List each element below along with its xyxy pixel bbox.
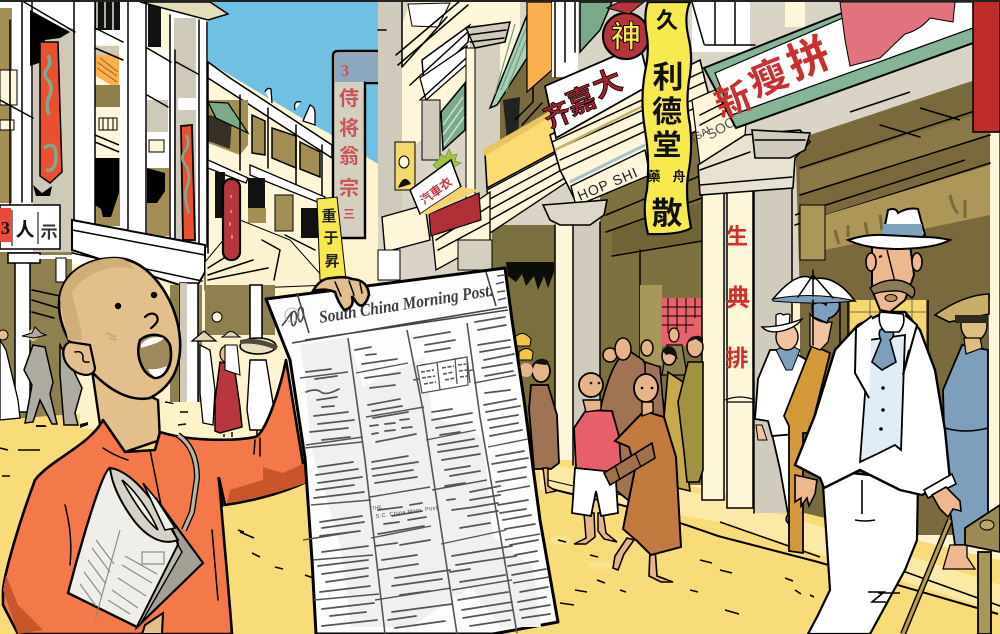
- umbrella: [773, 270, 855, 345]
- hanging yellow sign: 昇: [324, 253, 340, 270]
- lapels: [855, 315, 917, 398]
- tunic folds: [65, 438, 260, 600]
- collar: [879, 312, 904, 332]
- hanging grey sign: 宗: [339, 176, 359, 200]
- sidewalk and street: [0, 402, 1000, 634]
- hand under bundle: [142, 613, 163, 634]
- sign: small vendor sign: 汽車衣: [417, 174, 455, 207]
- waistcoat: [860, 335, 905, 462]
- awning: green striped: [490, 15, 527, 108]
- figure: boy in brown robe carrying parcel: [604, 374, 681, 582]
- masthead logo: [282, 307, 303, 326]
- body copy strokes: [306, 369, 377, 626]
- shop band: cream left: [382, 205, 430, 252]
- left shop sign: [0, 205, 60, 249]
- banner: narrow red banner: [181, 125, 195, 240]
- hanging yellow sign: 于: [323, 231, 339, 247]
- left hand: [795, 475, 817, 506]
- white hat: [848, 208, 950, 249]
- sign: large green framed sign: 拼: [781, 30, 837, 89]
- column: middle pillar: [543, 200, 607, 467]
- figure: gentleman in white suit with cane: [795, 208, 961, 634]
- columns of right building: [543, 130, 810, 513]
- sign: tall yellow vertical: 利: [652, 60, 684, 95]
- sign: TSAI lettering: TSAI: [688, 125, 713, 146]
- newsboy: [3, 258, 306, 634]
- open mouth: [138, 335, 171, 378]
- awning: orange: [527, 2, 552, 92]
- column: main front pillar: 排: [726, 346, 748, 371]
- background pedestrians left: [0, 327, 278, 442]
- hanging grey sign: [333, 51, 380, 238]
- head shading: [60, 258, 135, 340]
- hanging yellow sign: 重: [321, 207, 337, 225]
- ear: [63, 342, 95, 375]
- small masthead caption in paper: THE: [371, 505, 383, 512]
- column rules: [348, 323, 517, 634]
- left shop sign: 3: [1, 218, 10, 238]
- sign: large white sign with dark red characters: 嘉: [562, 80, 601, 122]
- figure: man behind with hat: [222, 332, 240, 375]
- sign: TSAI lettering: SOC: [704, 114, 738, 143]
- figure: figure with conical hat in white: [192, 331, 216, 425]
- first-floor cornice: [72, 220, 205, 290]
- figure: olive man at column: [678, 336, 703, 482]
- cane: [903, 520, 950, 634]
- sign: tall yellow vertical: 散: [652, 196, 682, 231]
- sky: [205, 2, 380, 165]
- sign: large white sign with dark red characters: [539, 45, 650, 138]
- right hand on cane: [932, 487, 961, 517]
- background crowd near pink window: [598, 328, 703, 520]
- tunic shading: [227, 463, 306, 503]
- sign: tall yellow vertical: 堂: [652, 129, 682, 162]
- sheet: [266, 268, 558, 634]
- sleeve cuff right: [924, 474, 956, 498]
- paper caption: S.C. China Morn. Post: [375, 505, 438, 520]
- figure: woman in red coat: [215, 346, 242, 437]
- figure: boy in red shirt: [572, 373, 621, 544]
- lantern stand: [965, 505, 1000, 634]
- figure: man in blue with conical hat: [935, 294, 989, 569]
- sign: tall yellow vertical: 藥: [647, 169, 661, 184]
- sign: tall yellow vertical: [642, 2, 691, 234]
- hand gripping newspaper: [313, 277, 369, 310]
- hanging grey sign: 三: [343, 207, 355, 221]
- ground floor arcade left: [0, 252, 75, 422]
- ceiling of veranda: [795, 55, 990, 300]
- sign: large white sign with dark red characters: 齐: [539, 97, 576, 135]
- figure: man in grey suit: [22, 327, 57, 427]
- figure: white-robed person with wide hat: [240, 338, 278, 442]
- rolled newspapers: [68, 468, 203, 627]
- sign: large green framed sign: 瘦: [743, 52, 794, 105]
- masthead divider: [292, 272, 508, 343]
- sign: TSAI lettering: [688, 90, 750, 146]
- shop beams: [550, 60, 715, 200]
- shop window: yellow panes: [848, 245, 928, 365]
- sign: tall yellow vertical: 久: [656, 8, 678, 33]
- figure: second man in grey: [60, 345, 88, 428]
- recess shadow behind newspaper: [506, 262, 554, 290]
- sign: small vendor sign: [410, 160, 461, 214]
- cheek marks: [106, 333, 117, 340]
- banner: red left banner: [40, 42, 62, 183]
- face: [872, 245, 914, 312]
- nose: [145, 314, 158, 328]
- shop band: yellow: [485, 112, 558, 188]
- moustache: [870, 280, 915, 298]
- sign: round red medallion: [603, 2, 649, 59]
- left shop sign: 人: [15, 219, 35, 241]
- suit jacket: [795, 312, 950, 495]
- hanging grey sign: 将: [339, 117, 359, 140]
- lower column and arcade: [56, 258, 202, 405]
- figure: lady with umbrella in ochre coat: [773, 270, 855, 553]
- shop band: red: [429, 193, 481, 236]
- neck: [92, 370, 160, 452]
- cravat: [872, 328, 896, 370]
- sign: large white sign with dark red characters: 大: [588, 63, 627, 105]
- sign: tall yellow vertical: 德: [652, 96, 682, 129]
- parcel: [604, 443, 655, 485]
- sign: tall yellow vertical: 舟: [672, 169, 686, 184]
- sign: round red medallion: 神: [611, 21, 641, 54]
- mid-distance building: [205, 62, 332, 345]
- figure: olive jacket man: [657, 346, 694, 491]
- hanging grey sign: 3: [341, 61, 349, 80]
- shoulder strap: [178, 435, 197, 530]
- orange tunic: [3, 360, 306, 634]
- right building: storeys, signs and arcade interior: [378, 0, 1000, 535]
- left shop sign: 示: [40, 223, 58, 242]
- figure: lady in white dress: [0, 330, 20, 420]
- left colonial building: [0, 2, 228, 422]
- sign: HOP SHI shopfront: HOP SHI: [575, 164, 640, 204]
- column: main front pillar: 典: [726, 285, 750, 312]
- hanging yellow sign: [317, 197, 346, 280]
- hanging grey sign: 翁: [339, 145, 359, 168]
- paper wash: [300, 337, 541, 627]
- table grid: [417, 357, 470, 393]
- figure: brown man behind newspaper: [515, 333, 559, 493]
- plant: [433, 149, 461, 171]
- sign: large green framed sign: [704, 2, 976, 128]
- head: [59, 258, 180, 399]
- trousers: [808, 470, 918, 634]
- red pillar: [973, 0, 1000, 132]
- row rules: [300, 363, 549, 600]
- column: main front pillar: 生: [726, 224, 748, 249]
- masthead title: South China Morning Post.: [317, 280, 494, 327]
- newspaper: South China Morning Post: [266, 268, 558, 634]
- column: main front pillar: [698, 130, 810, 513]
- figure: man in white with small hat: [755, 314, 815, 525]
- pink lattice window: [661, 298, 703, 346]
- sign: HOP SHI shopfront: [570, 145, 650, 206]
- sign: large green framed sign: 新: [709, 76, 758, 126]
- right arcade: shop interior: [492, 120, 1000, 535]
- eyes: [115, 292, 157, 309]
- top frame line: [0, 0, 1000, 2]
- hanging red lozenge sign: [223, 179, 240, 260]
- hanging grey sign: 侍: [339, 87, 359, 110]
- awning: green: [208, 102, 248, 133]
- curtain: pink cloth: [840, 2, 955, 66]
